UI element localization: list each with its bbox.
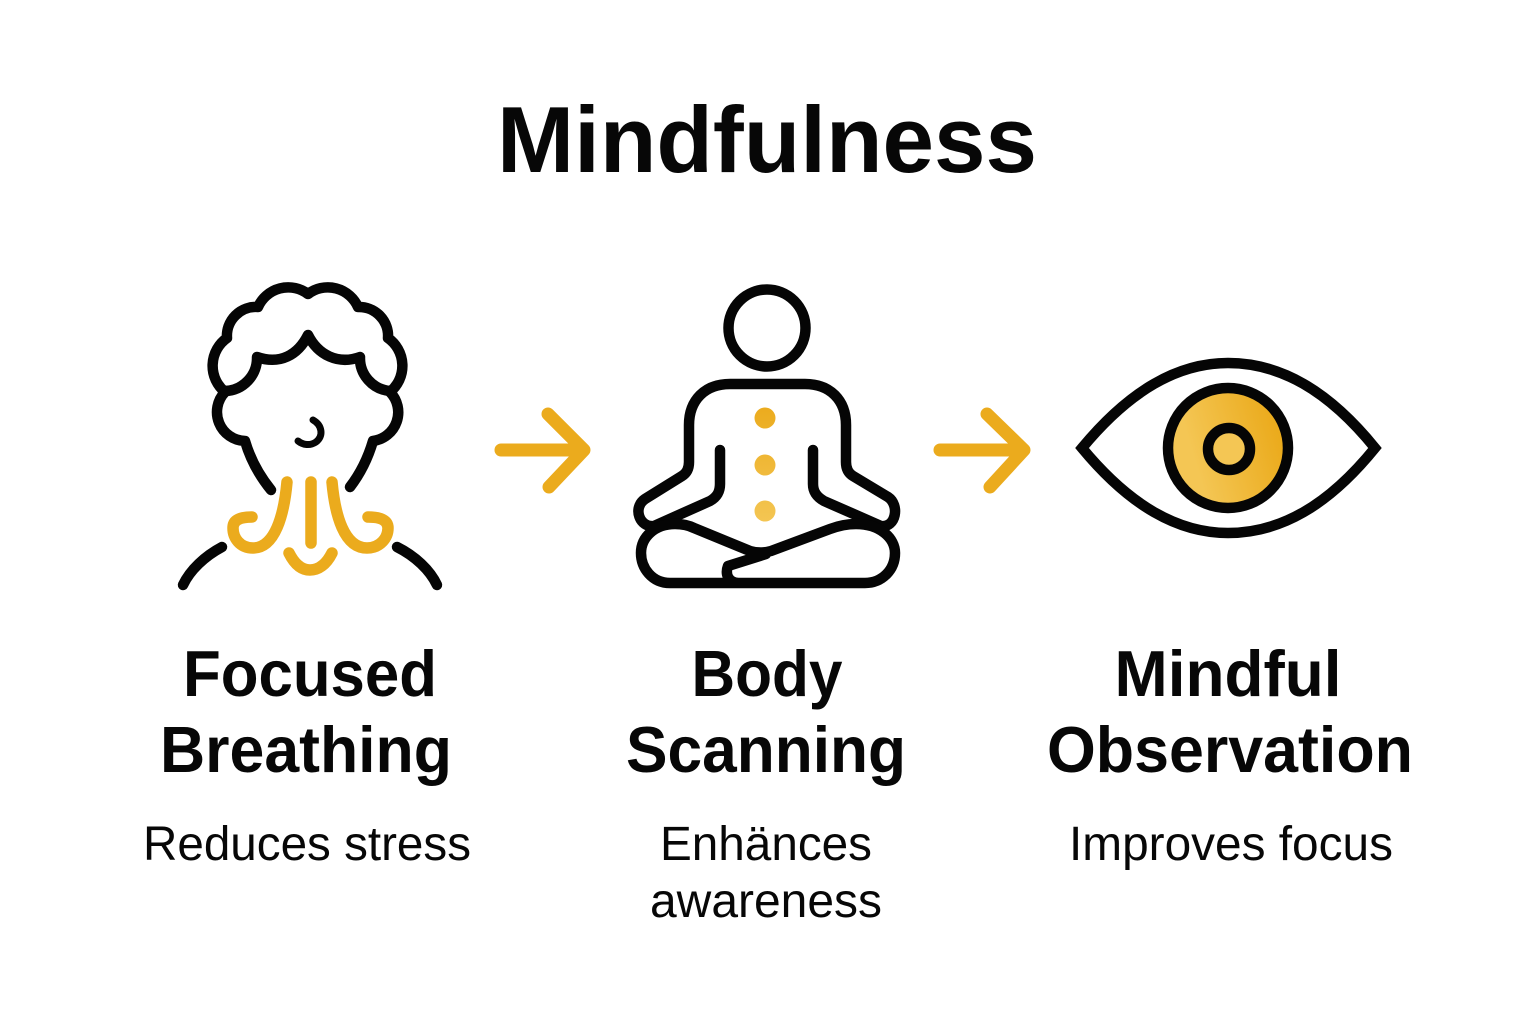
icon: meditating figure	[638, 290, 895, 583]
energy dot middle	[754, 454, 776, 476]
column two text	[626, 637, 906, 928]
left shoulder	[183, 547, 222, 585]
torso and arms	[638, 384, 895, 526]
arrow one	[501, 414, 584, 487]
heading: focused breathing: Breathing	[160, 713, 452, 786]
energy dot lower	[754, 500, 776, 522]
arrow two	[940, 414, 1024, 487]
heading: body scanning: Scanning	[626, 713, 906, 786]
eye outline	[1082, 363, 1375, 533]
right shoulder	[397, 547, 437, 585]
heading: mindful observation: Observation	[1047, 713, 1413, 786]
nose or face mark	[298, 420, 321, 445]
description: Enhänces	[660, 818, 872, 871]
airflow left	[233, 482, 287, 548]
icon: focused breathing head	[183, 287, 437, 585]
pupil	[1208, 428, 1250, 470]
column three text	[1047, 637, 1413, 871]
head	[728, 290, 806, 366]
title: Mindfulness	[497, 87, 1037, 192]
description: Improves focus	[1069, 818, 1393, 871]
crossed legs	[641, 524, 895, 583]
heading: mindful observation	[1047, 637, 1413, 786]
icon: eye	[1082, 363, 1375, 533]
description: awareness	[650, 875, 882, 928]
column one text	[143, 637, 471, 871]
heading: focused breathing	[160, 637, 452, 786]
heading: body scanning	[626, 637, 906, 786]
heading: body scanning: Body	[692, 637, 842, 710]
energy dot upper	[754, 408, 776, 428]
iris	[1168, 388, 1288, 508]
airflow right	[332, 482, 388, 548]
hair fringe	[225, 335, 390, 391]
airflow bottom curve	[289, 553, 332, 570]
heading: focused breathing: Focused	[183, 637, 437, 710]
airflow centre	[305, 482, 317, 543]
head and hair outline	[213, 287, 402, 490]
description	[650, 818, 882, 928]
description: Reduces stress	[143, 818, 471, 871]
heading: mindful observation: Mindful	[1114, 637, 1342, 710]
